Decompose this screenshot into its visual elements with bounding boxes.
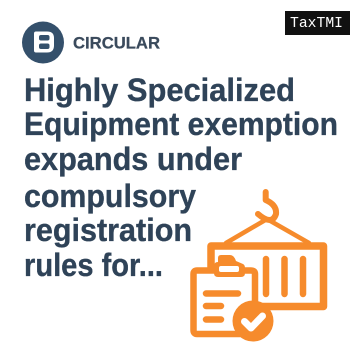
title: expands under xyxy=(24,141,242,177)
title: Equipment exemption xyxy=(24,106,338,142)
icon: sling xyxy=(226,219,309,243)
title: registration xyxy=(24,212,192,248)
icon: check mark xyxy=(244,316,262,328)
icon: clipboard xyxy=(194,270,255,334)
title: Highly Specialized xyxy=(24,72,295,108)
watermark: TaxTMI: TaxTMI xyxy=(290,15,343,32)
icon: clipboard clip xyxy=(214,255,245,277)
icon: container body xyxy=(211,246,324,306)
title: rules for... xyxy=(24,247,163,283)
icon: crane hook xyxy=(258,192,276,220)
title xyxy=(24,72,338,283)
icon: container with clipboard xyxy=(194,192,324,342)
icon: clipboard lines xyxy=(206,294,238,320)
logo badge xyxy=(22,22,64,64)
title: compulsory xyxy=(24,178,196,214)
watermark: TaxTMI xyxy=(285,11,350,35)
icon: check badge xyxy=(232,300,274,342)
category label: circular: CIRCULAR xyxy=(73,33,160,52)
icon: container bars xyxy=(266,259,303,294)
